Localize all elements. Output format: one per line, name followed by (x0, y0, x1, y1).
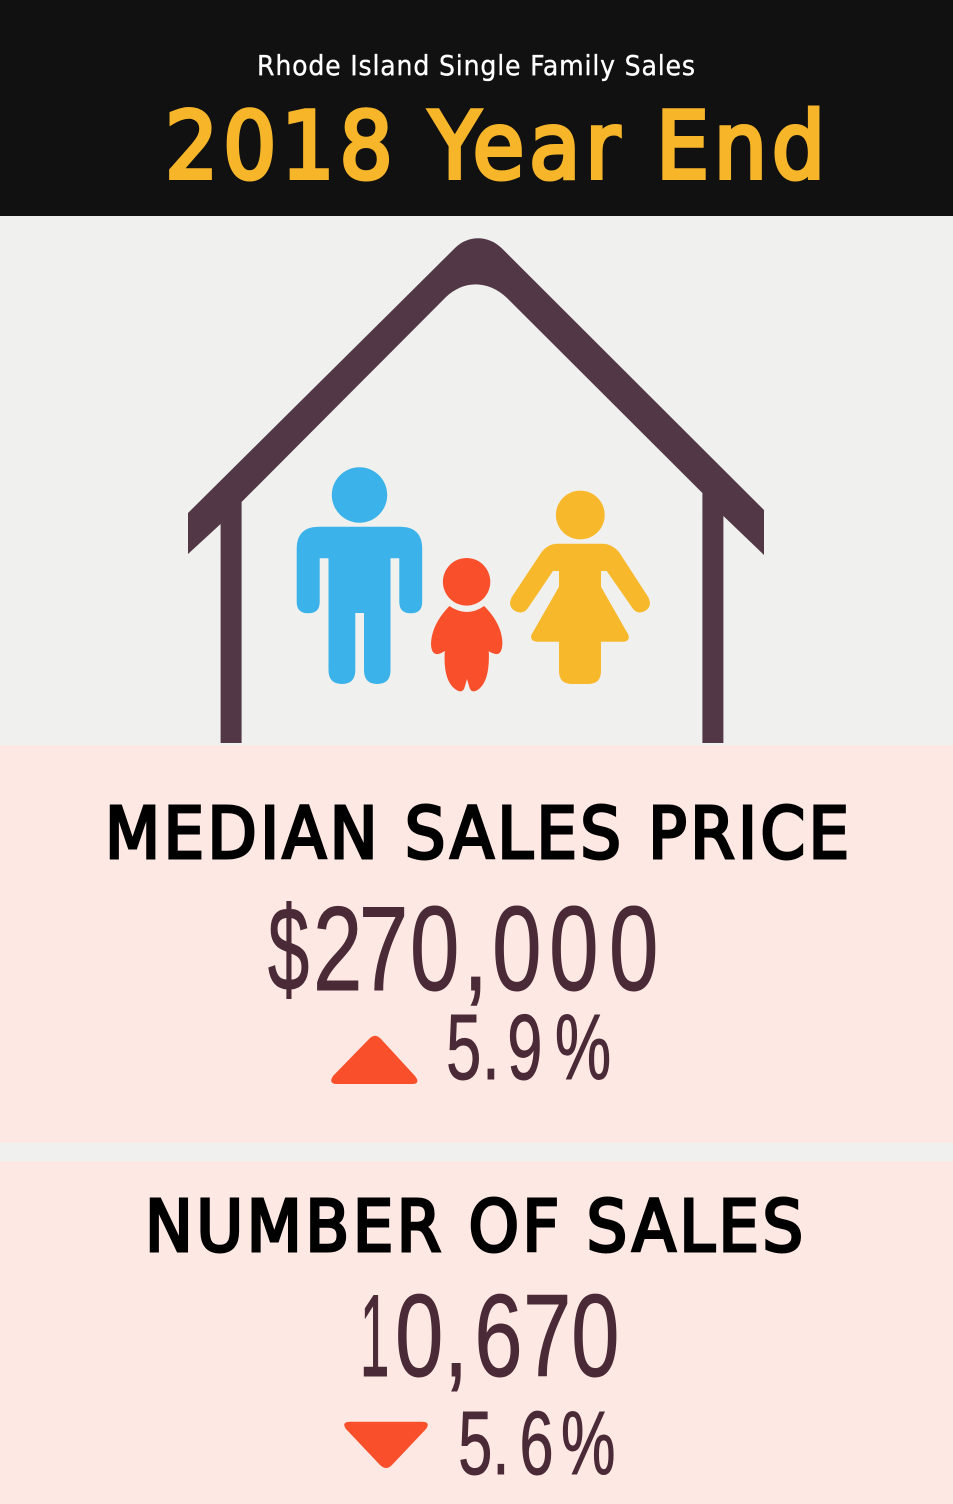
icon: mother (510, 491, 650, 684)
panel: median sales price (0, 745, 953, 1143)
icon: house outline (188, 238, 764, 743)
heading: NUMBER OF SALES (145, 1185, 803, 1268)
header band (0, 0, 953, 216)
value: 270,000 (313, 882, 658, 1016)
house illustration (188, 238, 764, 743)
title: 2018 Year End (165, 92, 825, 200)
subtitle: Rhode Island Single Family Sales (257, 49, 695, 82)
icon: father (297, 467, 422, 684)
value: $ (268, 883, 309, 1016)
change: 5.6% (458, 1393, 615, 1494)
value: 0,670 (395, 1270, 619, 1401)
heading: MEDIAN SALES PRICE (105, 792, 849, 875)
value: 1 (360, 1272, 389, 1402)
icon: up arrow (331, 1036, 417, 1084)
icon: down arrow (344, 1422, 428, 1468)
icon: child (431, 558, 502, 691)
change: 5.9% (446, 995, 611, 1099)
panel: number of sales (0, 1161, 953, 1504)
